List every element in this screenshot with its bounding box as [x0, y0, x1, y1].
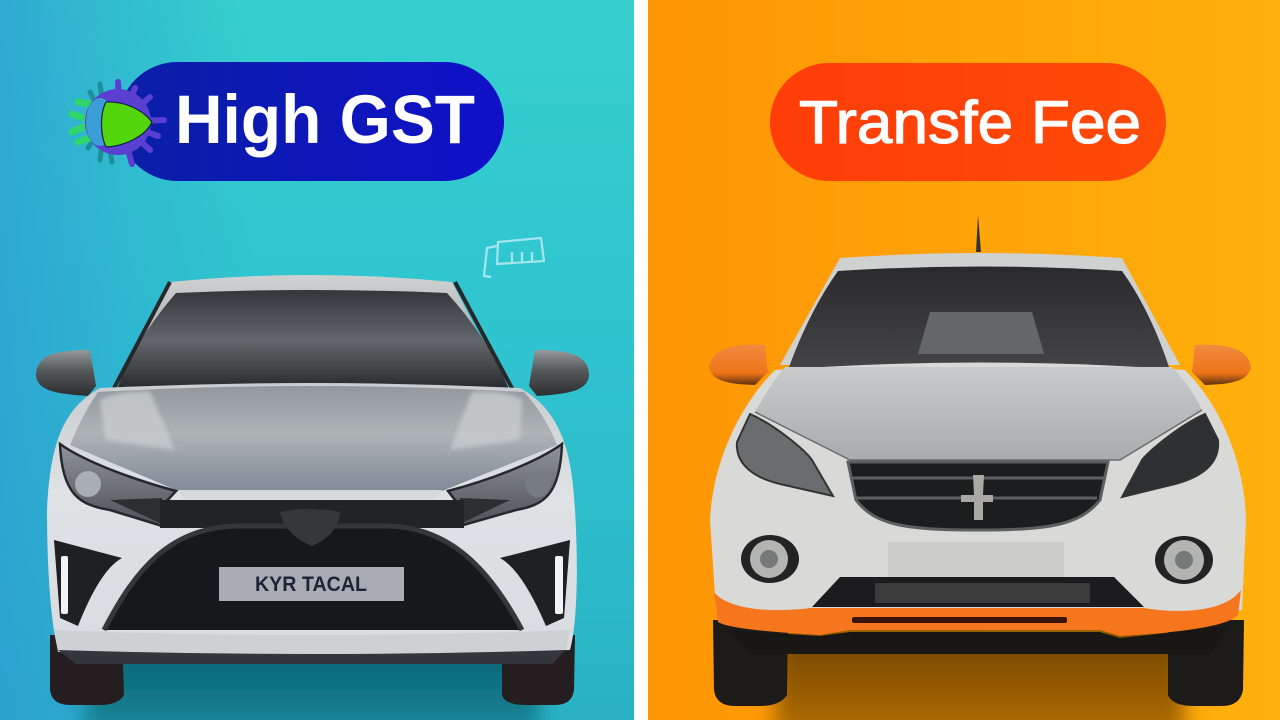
body: [47, 383, 577, 656]
windshield: [116, 290, 510, 392]
icon: right tyre: [502, 635, 575, 705]
heading badge: High GST: [118, 62, 504, 181]
icon: right mirror: [1192, 345, 1251, 385]
icon: left mirror: [36, 350, 96, 396]
icon: left tyre: [713, 620, 788, 706]
hood: [755, 367, 1202, 460]
divider: white vertical bar: [634, 0, 648, 720]
license plate: [219, 567, 404, 601]
icon: badge: [280, 509, 340, 546]
icon: antenna: [976, 215, 981, 252]
illustration: silver car front view: [36, 275, 589, 720]
left air intake: [54, 540, 122, 626]
heading: Transfe Fee: Transfe Fee: [799, 89, 1141, 156]
icon: left fog lamp: [741, 535, 799, 583]
icon: left headlight: [737, 414, 833, 496]
lower grille: [104, 526, 522, 630]
front grille: [848, 462, 1108, 530]
plate text: KYR TACAL: [255, 573, 367, 596]
reflection: [918, 312, 1044, 354]
icon: right tyre: [1168, 620, 1244, 706]
body: [710, 362, 1246, 625]
right air intake: [500, 540, 570, 626]
icon: right headlight: [448, 444, 562, 526]
blank license plate: [888, 542, 1064, 577]
icon: left tyre: [50, 635, 124, 705]
icon: faint outline hand sign: [484, 238, 544, 277]
icon: grille emblem: [961, 475, 993, 520]
icon: green spiky emblem: [72, 82, 164, 164]
icon: left headlight: [60, 444, 176, 526]
icon: left mirror: [709, 345, 768, 385]
icon: right headlight: [1122, 414, 1218, 497]
panel: right orange background: [648, 0, 1280, 720]
orange lip: [714, 590, 1241, 636]
panel: left teal background: [0, 0, 634, 720]
icon: right mirror: [529, 350, 589, 396]
windshield: [789, 266, 1169, 367]
lower grille: [812, 577, 1144, 607]
illustration: white car front view: [709, 215, 1251, 720]
dark belt grille: [160, 500, 464, 528]
heading badge: Transfe Fee: [770, 63, 1166, 181]
heading: High GST: High GST: [175, 81, 475, 158]
icon: right fog lamp: [1155, 536, 1213, 584]
hood: [70, 386, 557, 491]
